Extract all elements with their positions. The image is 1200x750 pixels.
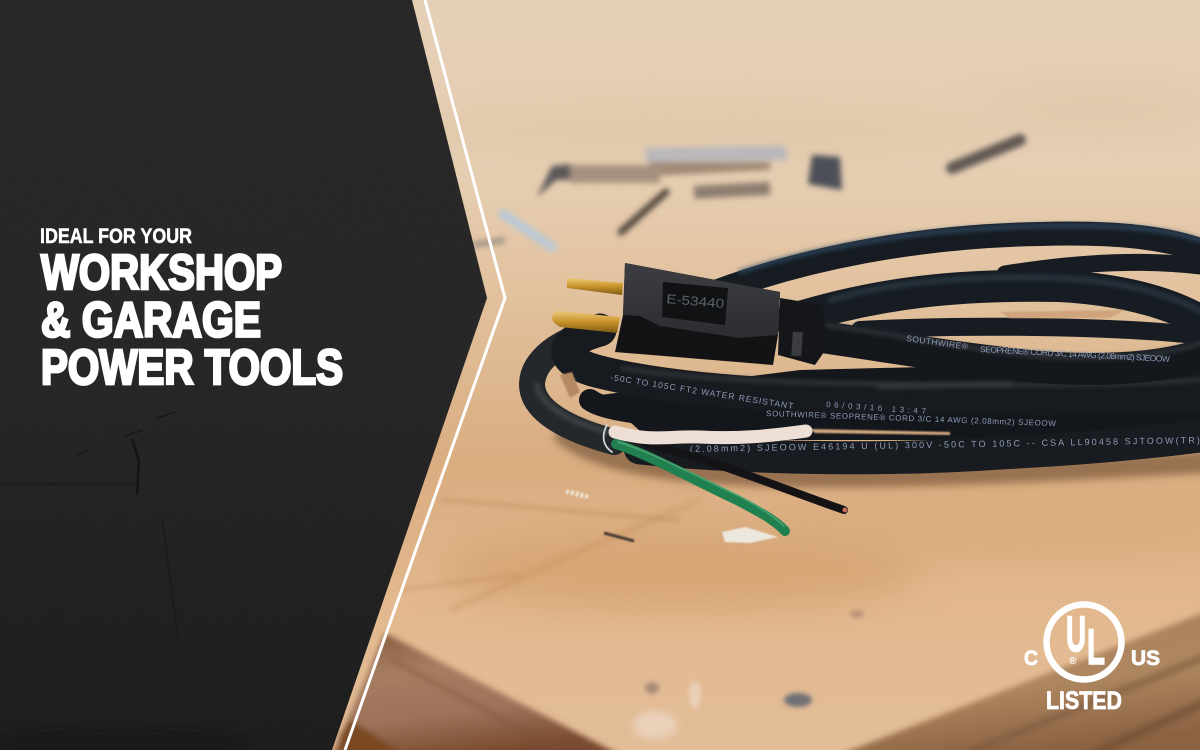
plug body — [615, 263, 780, 365]
photo: plug — [552, 263, 824, 365]
cord printing: (2.08mm2) SJEOOW E46194 U (UL) 300V -50C TO 105C -- CSA LL90458 SJTOOW(TR) — [690, 435, 1200, 454]
title line 3: POWER TOOLS — [41, 341, 343, 395]
cord printing — [610, 333, 1200, 454]
blurred screws and metal parts — [472, 140, 1020, 247]
cord printing: SOUTHWIRE® — [906, 333, 969, 352]
heading text — [40, 224, 343, 395]
UL listed certification mark: L — [1087, 619, 1105, 675]
white chevron outline — [345, 0, 505, 750]
back coils — [700, 234, 1200, 335]
cord printing: -50C TO 105C FT2 WATER RESISTANT — [610, 372, 794, 411]
brass prongs — [567, 278, 623, 295]
cord printing: SEOPRENE® CORD 3/C 14 AWG (2.08mm2) SJEOOW — [980, 344, 1170, 364]
dark chevron panel — [0, 0, 500, 750]
wood glimpses between coils — [560, 310, 1125, 435]
lower coils — [600, 360, 1200, 440]
cord printing: SOUTHWIRE® SEOPRENE® CORD 3/C 14 AWG (2.08mm2) SJEOOW — [766, 409, 1057, 428]
plug label plate: E-53440 — [666, 291, 725, 311]
title line 1: WORKSHOP — [41, 246, 282, 300]
eyebrow line: IDEAL FOR YOUR — [40, 224, 192, 248]
table front edge — [330, 610, 1200, 750]
cord printing: 06/03/16 13:47 — [826, 400, 927, 416]
exposed wires — [604, 425, 848, 531]
UL listed certification mark: U — [1066, 606, 1086, 662]
UL listed certification mark — [1024, 604, 1160, 715]
title line 2: & GARAGE — [41, 294, 261, 348]
UL listed certification mark: C — [1024, 647, 1038, 670]
wood marks — [566, 491, 864, 739]
strain relief collar — [778, 298, 824, 365]
cord shadow — [560, 430, 1200, 477]
main cord from plug — [815, 336, 1200, 369]
UL listed certification mark: US — [1131, 647, 1160, 670]
plug label plate — [662, 282, 728, 325]
UL listed certification mark: LISTED — [1046, 687, 1122, 715]
photo: coiled black power cord — [532, 226, 1200, 531]
UL listed certification mark: ® — [1069, 656, 1077, 667]
